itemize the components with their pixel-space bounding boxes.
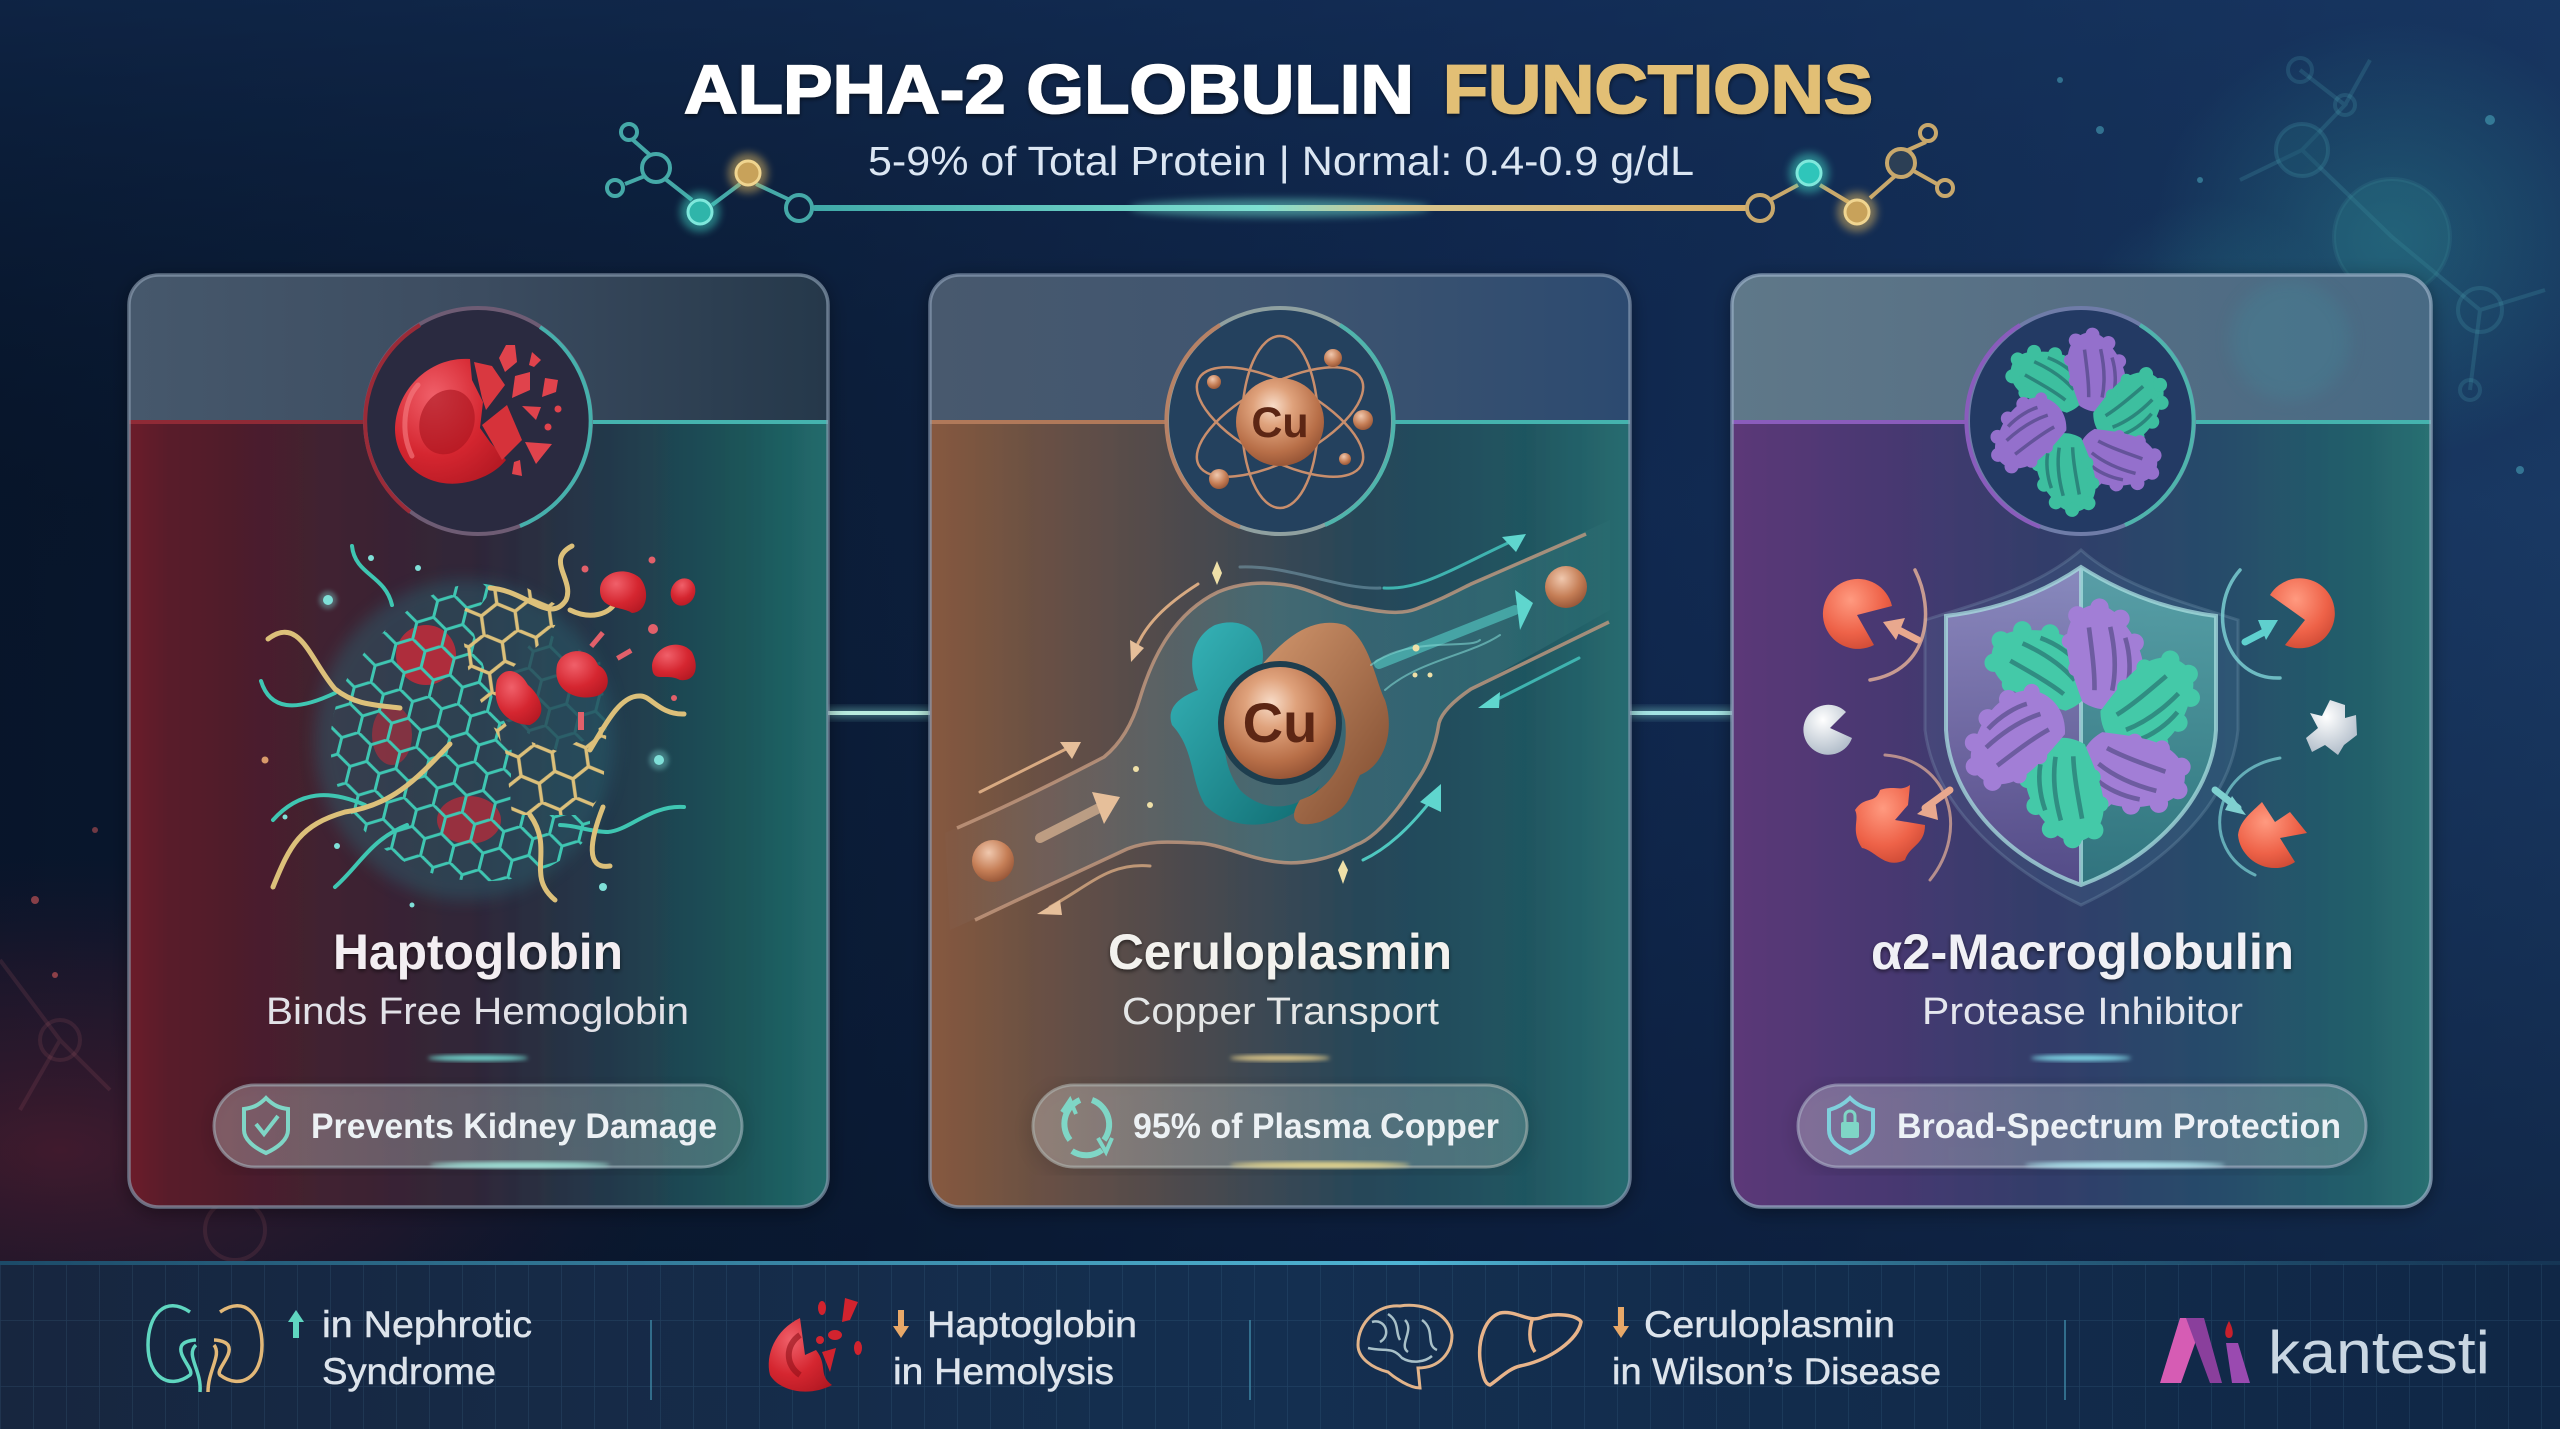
title: FUNCTIONS [1443,51,1873,128]
text: binds free hemoglobin: Binds Free Hemoglobin [266,991,689,1033]
icon: copper atom [1166,308,1394,534]
title [684,51,1873,128]
note: nephrotic syndrome: Syndrome [322,1351,496,1392]
accent line [428,1055,528,1061]
note: nephrotic syndrome [288,1304,532,1392]
title: ALPHA-2 GLOBULIN [684,51,1414,128]
icon: brain [1358,1305,1452,1388]
note: haptoglobin in hemolysis: in Hemolysis [893,1351,1114,1392]
note: ceruloplasmin in wilson's disease: in Wilson’s Disease [1612,1351,1941,1392]
illustration: copper transport channel [945,520,1610,930]
text: protease inhibitor: Protease Inhibitor [1922,991,2243,1033]
connector: card 1 to card 2 [826,708,932,718]
icon: macroglobulin protein [1966,308,2194,534]
callout: broad-spectrum protection: Broad-Spectrum Protection [1897,1107,2341,1146]
icon: protease blob, bottom left [1855,785,1925,863]
callout: broad-spectrum protection [1798,1085,2366,1168]
icon: liver [1480,1313,1581,1385]
heading: haptoglobin: Haptoglobin [333,924,623,980]
note: haptoglobin in hemolysis [893,1304,1137,1392]
subtitle: 5-9% of Total Protein | Normal: 0.4-0.9 g/dL [868,138,1694,184]
icon: ruptured red blood cell [365,308,591,534]
illustration: copper transport channel: Cu [1243,691,1317,754]
decorative molecules, top right [2057,58,2545,474]
icon: protease pacman, top left [1823,579,1892,649]
callout: 95% of plasma copper: 95% of Plasma Copper [1133,1107,1499,1146]
heading: ceruloplasmin: Ceruloplasmin [1108,924,1452,980]
icon: blood cell burst [769,1298,862,1392]
text: copper transport: Copper Transport [1122,991,1439,1033]
note: haptoglobin in hemolysis: Haptoglobin [927,1304,1137,1345]
note: ceruloplasmin in wilson's disease [1612,1304,1941,1392]
callout: prevents kidney damage: Prevents Kidney Damage [311,1107,717,1146]
logo: kantesti: kantesti [2268,1319,2490,1386]
accent line [1230,1055,1330,1061]
callout: 95% of plasma copper [1033,1085,1527,1168]
accent line [2031,1055,2131,1061]
molecule divider [607,124,1953,232]
icon: protease pacman, top right [2270,578,2335,648]
panel: alpha-2 macroglobulin [1732,275,2435,1207]
panel: ceruloplasmin [930,275,1635,1207]
icon: recycle arrows [1062,1100,1112,1155]
icon: protease pacman, bottom right [2238,802,2307,868]
heading: alpha-2 macroglobulin: α2-Macroglobulin [1871,924,2294,980]
note: nephrotic syndrome: in Nephrotic [322,1304,532,1345]
note: ceruloplasmin in wilson's disease: Ceruloplasmin [1644,1304,1895,1345]
connector: card 2 to card 3 [1628,708,1734,718]
illustration: protective shield [1803,550,2357,905]
icon: shield lock [1829,1098,1873,1153]
panel: clinical footer [0,1261,2560,1429]
icon: copper atom: Cu [1251,399,1309,447]
illustration: net capturing hemoglobin [261,546,700,908]
icon: white puzzle fragment, right [2306,700,2357,755]
decorative molecules, lower left [0,827,265,1260]
logo: kantesti [2160,1318,2490,1386]
callout: prevents kidney damage [214,1085,742,1168]
icon: shield check [244,1098,288,1153]
panel: haptoglobin [129,275,830,1207]
icon: kidneys [148,1306,262,1392]
icon: white fragment, left [1803,705,1852,755]
